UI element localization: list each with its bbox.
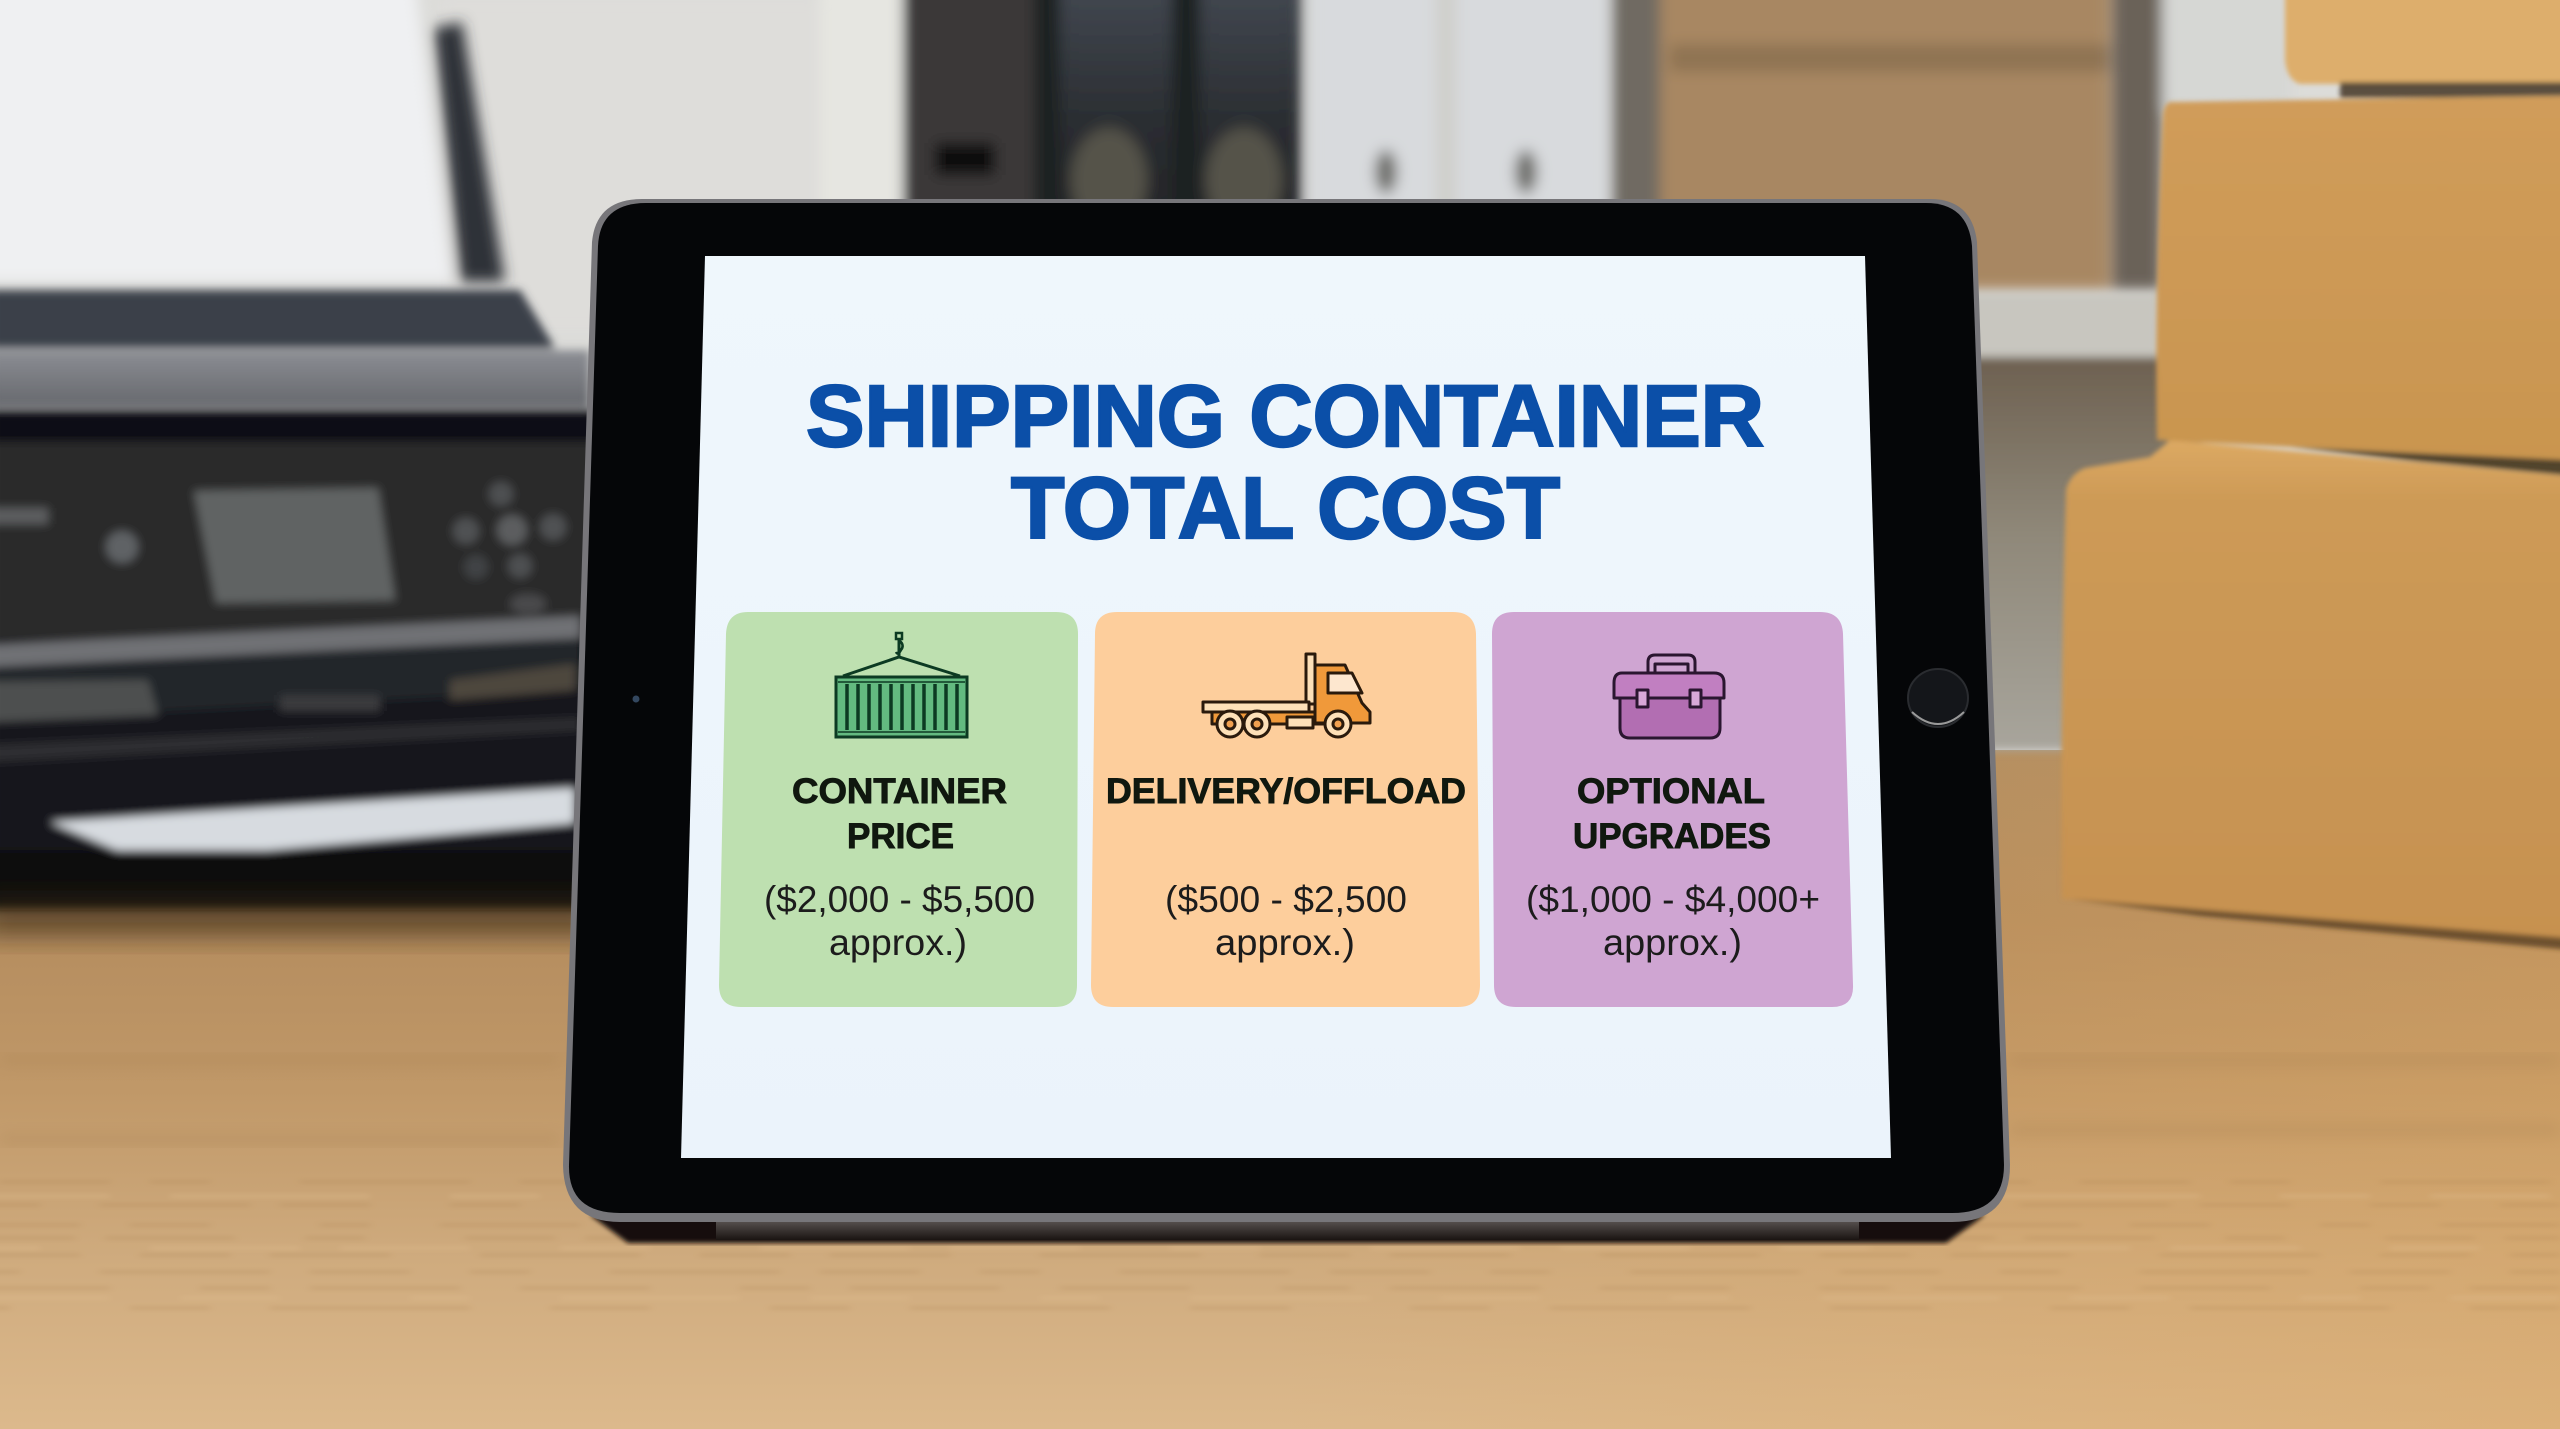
title bbox=[806, 368, 1764, 557]
card heading: CONTAINER bbox=[792, 772, 1007, 811]
card heading: OPTIONAL bbox=[1577, 772, 1765, 811]
price range: ($1,000 - $4,000+ bbox=[1526, 879, 1820, 920]
bottom box bbox=[2062, 440, 2560, 940]
card heading: PRICE bbox=[847, 817, 954, 856]
home button bbox=[1908, 669, 1968, 727]
price range: approx.) bbox=[829, 922, 967, 963]
price range: ($2,000 - $5,500 bbox=[764, 879, 1035, 920]
title: TOTAL COST bbox=[1011, 460, 1560, 557]
price range: approx.) bbox=[1215, 922, 1355, 963]
icon: toolbox bbox=[1614, 655, 1724, 738]
shelf items bbox=[440, 0, 2292, 330]
card heading bbox=[792, 772, 1007, 856]
price range: approx.) bbox=[1603, 922, 1742, 963]
tablet shadow on desk bbox=[590, 1215, 1985, 1243]
lower shelf bbox=[1960, 293, 2200, 750]
tablet bezel bbox=[569, 203, 2004, 1213]
price range bbox=[1165, 879, 1407, 963]
price range: ($500 - $2,500 bbox=[1165, 879, 1407, 920]
card heading: UPGRADES bbox=[1573, 817, 1771, 856]
top box bbox=[2285, 0, 2560, 84]
wall bbox=[0, 0, 2560, 800]
card heading: DELIVERY/OFFLOAD bbox=[1106, 772, 1466, 811]
icon: flatbed truck bbox=[1203, 654, 1370, 737]
tablet bbox=[563, 199, 2010, 1240]
title: SHIPPING CONTAINER bbox=[806, 368, 1764, 465]
tablet screen bbox=[681, 256, 1891, 1158]
panel: container price bbox=[719, 612, 1078, 1007]
printer in background bbox=[0, 0, 600, 934]
panel: delivery and offload bbox=[1091, 612, 1480, 1007]
price range bbox=[1526, 879, 1820, 963]
icon: shipping container on crane hook bbox=[836, 633, 967, 737]
tablet foot bbox=[716, 1220, 1859, 1240]
middle box bbox=[2156, 96, 2560, 462]
wooden desk bbox=[0, 750, 2560, 1429]
panel: optional upgrades bbox=[1492, 612, 1853, 1007]
stacked cardboard boxes bbox=[2062, 0, 2560, 950]
card heading bbox=[1573, 772, 1771, 856]
price range bbox=[764, 879, 1035, 963]
tablet casing bbox=[563, 199, 2010, 1222]
front camera bbox=[632, 696, 640, 702]
